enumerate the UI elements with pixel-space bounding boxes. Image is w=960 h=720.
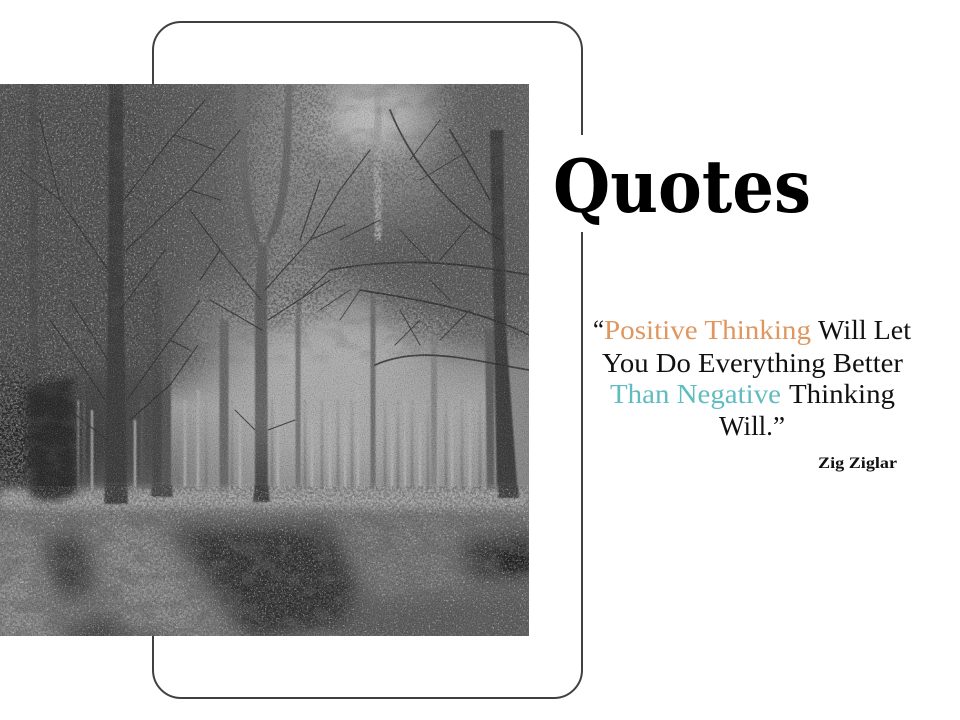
trunk bases over grass (104, 485, 519, 504)
quote line 4: Will.” (719, 410, 785, 441)
mid-distance trunks (157, 84, 434, 498)
tree branches (20, 100, 529, 440)
quote author: Zig Ziglar (818, 455, 897, 472)
forked centre tree (236, 84, 292, 503)
mottled light and shadow (0, 84, 529, 636)
opening quotation mark: “ (593, 314, 604, 345)
orange highlighted phrase: Positive Thinking (604, 314, 811, 345)
quote line 2: You Do Everything Better (602, 347, 903, 378)
quote text block (593, 314, 911, 441)
quote line 3 end: Thinking (789, 378, 895, 409)
rounded outline frame with gap for title (153, 22, 582, 698)
dark wheel track shadows (0, 525, 540, 650)
ivy-covered dark trunk mass (26, 378, 78, 501)
canopy foliage speckle (0, 84, 529, 491)
distant thin tree trunks (78, 390, 480, 490)
dark hollow at right edge (499, 547, 531, 573)
teal highlighted phrase: Than Negative (610, 378, 781, 409)
forest floor (0, 128, 529, 636)
lit grass band (0, 489, 529, 509)
slim far-left trunk (29, 84, 38, 385)
foreground trunks (29, 84, 518, 503)
right trunk (490, 130, 518, 498)
large left trunk (105, 84, 127, 503)
overall film grain (0, 84, 529, 636)
photo: misty black and white forest (0, 84, 529, 636)
title: Quotes (553, 144, 811, 230)
quote line 1 end: Will Let (818, 314, 911, 345)
soft light and shadow masses (0, 60, 550, 510)
mist over distant trunks (170, 360, 490, 495)
photo base tone (0, 84, 529, 636)
ground tone (0, 497, 529, 637)
grass texture (0, 486, 529, 636)
